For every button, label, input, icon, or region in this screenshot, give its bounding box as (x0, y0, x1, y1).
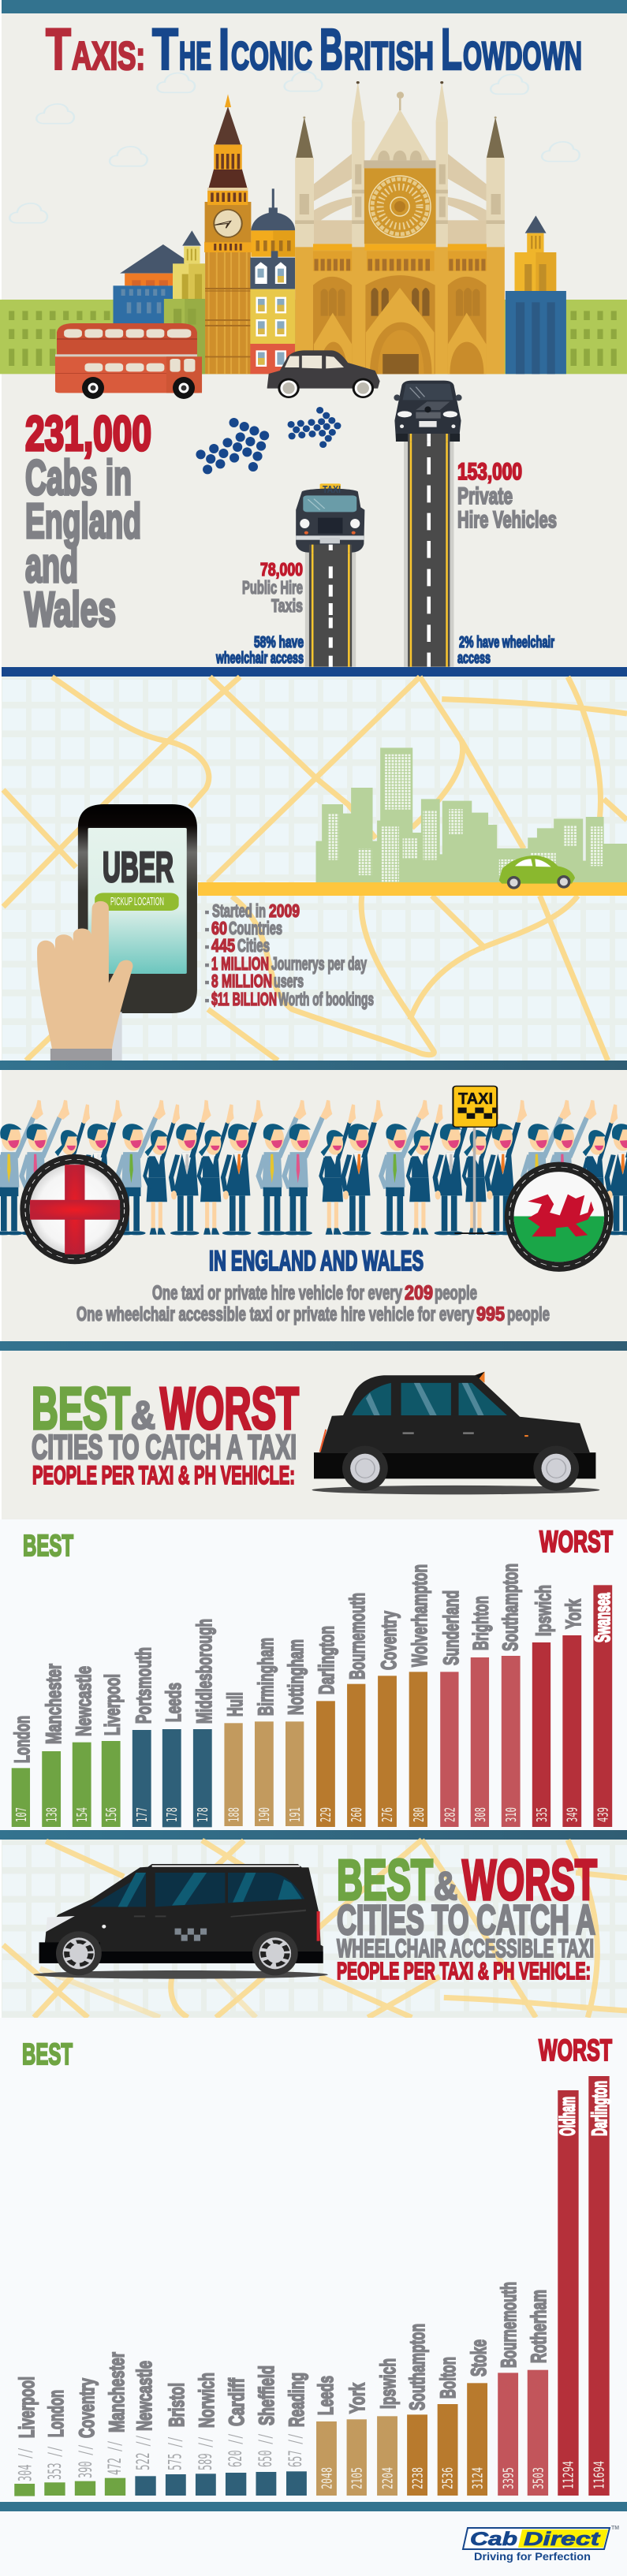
black taxi side view (312, 1372, 600, 1494)
Westminster Abbey (295, 81, 505, 374)
city names: Manchester (105, 2352, 129, 2432)
private hire road markings (408, 434, 450, 442)
bars (12, 1585, 612, 1827)
values above bars: 575 // (166, 2436, 186, 2470)
values: 276 (379, 1807, 396, 1822)
values: 439 (595, 1807, 612, 1822)
values: 178 (164, 1807, 181, 1822)
values: 308 (472, 1807, 489, 1822)
taxi sign text: TAXI (458, 1090, 493, 1108)
panel: chart 1 background (0, 1519, 627, 1830)
clouds (9, 72, 580, 223)
values: 177 (134, 1807, 151, 1822)
city names: Coventry (377, 1611, 401, 1670)
values above bars: 620 // (226, 2433, 246, 2467)
city names: Stoke (467, 2339, 491, 2377)
values above bars: 657 // (286, 2433, 306, 2467)
private hire wheelchair note: access (457, 650, 491, 667)
rose window (369, 176, 431, 237)
values above bars: 304 // (16, 2447, 36, 2481)
values (13, 1807, 612, 1822)
dot arrow large (196, 418, 269, 474)
city names: Brighton (468, 1596, 492, 1650)
values: 280 (411, 1807, 427, 1822)
town houses (250, 188, 295, 374)
city names: Ipswich (532, 1585, 555, 1636)
city names: Southampton (405, 2324, 429, 2410)
bar chart: wheelchair accessible (14, 2076, 611, 2496)
private hire car front (394, 381, 462, 442)
city names: Portsmouth (132, 1647, 155, 1724)
values inside bars (319, 2461, 607, 2489)
uber facts: - (205, 918, 209, 938)
private hire wheelchair note (457, 634, 554, 667)
public hire wheelchair note: 58% have (254, 634, 304, 651)
values: 156 (103, 1807, 120, 1822)
values inside bars: 2048 (319, 2467, 336, 2489)
city names (10, 1564, 614, 1763)
total cabs statistic: and (25, 539, 78, 593)
private hire road (404, 434, 453, 667)
black cab side (267, 350, 380, 398)
heading: best and worst cities: BEST (32, 1375, 130, 1441)
heading: wheelchair accessible (337, 1849, 597, 1985)
left houses (113, 230, 205, 374)
values: 188 (226, 1807, 243, 1822)
title: L (441, 17, 462, 82)
uber facts: - (205, 953, 209, 974)
city names: Southampton (498, 1564, 522, 1651)
city names: Bristol (165, 2383, 188, 2427)
uber facts: Worth of bookings (278, 989, 374, 1009)
logo: Cab Direct (463, 2526, 619, 2563)
city names: Wolverhampton (408, 1564, 431, 1667)
bar chart: people per taxi (10, 1564, 614, 1827)
title: AXIS: (72, 34, 145, 78)
city names: London (44, 2390, 68, 2437)
city names: Darlington (315, 1626, 338, 1694)
city names: Nottingham (284, 1639, 308, 1715)
total cabs statistic: 231,000 (25, 407, 151, 461)
taxi roof sign text: TAXI (323, 483, 341, 495)
city names: Bournemouth (345, 1593, 369, 1679)
best label: BEST (22, 2038, 73, 2071)
Big Ben (204, 94, 252, 374)
values above bars: 522 // (134, 2435, 154, 2470)
city names: Leeds (162, 1683, 185, 1722)
total cabs statistic: Cabs in (25, 451, 132, 505)
values inside bars: 2536 (440, 2467, 456, 2489)
city names: Hull (223, 1692, 247, 1717)
panel: wheelchair map (2, 1840, 627, 2018)
uber facts: 2009 (269, 900, 300, 921)
right tower (506, 215, 566, 374)
heading: wheelchair accessible: BEST (337, 1849, 433, 1912)
total cabs statistic: Wales (24, 583, 116, 637)
public hire wheelchair note: wheelchair access (215, 650, 304, 667)
values above bars: 472 // (106, 2440, 125, 2475)
flag: Wales (505, 1162, 614, 1272)
title: HE (179, 34, 211, 78)
blue divider bar (2, 667, 627, 677)
private hire statistic: Hire Vehicles (457, 507, 557, 533)
values: 282 (442, 1807, 459, 1822)
heading: best and worst cities (32, 1375, 299, 1489)
uber facts: users (274, 971, 304, 991)
city names: Bournemouth (497, 2282, 521, 2368)
city names: Ipswich (376, 2358, 400, 2409)
statistic lines (77, 1282, 550, 1325)
uber facts: - (205, 989, 209, 1009)
values inside bars: 3395 (500, 2467, 517, 2489)
city names: York (562, 1598, 585, 1629)
city names: Bolton (436, 2357, 460, 2399)
city names (15, 2081, 611, 2438)
city names: Oldham (555, 2097, 579, 2136)
public hire statistic: Taxis (271, 595, 303, 616)
map roads (3, 677, 627, 1061)
uber facts: - (205, 971, 209, 991)
values inside bars: 11294 (560, 2461, 577, 2489)
public hire statistic: 78,000 (260, 559, 303, 580)
double decker bus (55, 323, 202, 393)
taxi front (296, 483, 364, 553)
values above bars: 353 // (46, 2446, 65, 2480)
total cabs statistic: England (25, 494, 141, 549)
title: RITISH (344, 34, 434, 78)
uber facts: Journerys per day (271, 953, 367, 974)
uber facts: - (205, 935, 209, 956)
public hire wheelchair note (215, 634, 304, 667)
values: 154 (74, 1807, 91, 1822)
panel: uber map (2, 677, 627, 1061)
heading: wheelchair accessible: & (434, 1864, 457, 1908)
values: 229 (318, 1807, 334, 1822)
city names: Norwich (195, 2373, 218, 2428)
statistic lines: people (435, 1282, 477, 1304)
city skyline (316, 747, 627, 882)
values inside bars: 2204 (380, 2467, 396, 2489)
values inside bars: 11694 (592, 2461, 607, 2489)
values above bars: 650 // (256, 2433, 276, 2467)
city names: Newcastle (72, 1666, 95, 1736)
taxi stop sign (453, 1087, 497, 1234)
values: 190 (256, 1807, 273, 1822)
taxi road (305, 544, 356, 667)
teal divider bar (0, 1341, 627, 1351)
city names: Liverpool (101, 1674, 125, 1735)
private hire statistic: Private (457, 483, 513, 509)
values inside bars: 2105 (349, 2467, 366, 2489)
heading: best and worst cities: CITIES TO CATCH A TAXI (32, 1428, 297, 1467)
uber facts: 8 MILLION (211, 971, 272, 991)
city names: Coventry (75, 2378, 99, 2438)
title: I (218, 17, 230, 82)
city names: Sheffield (255, 2365, 278, 2425)
logo: Cab Direct: Driving for Perfection (474, 2550, 591, 2563)
city names: Swansea (591, 1592, 614, 1642)
city names: Birmingham (254, 1638, 278, 1716)
city names: Manchester (42, 1664, 65, 1744)
uber facts: 60 (211, 918, 227, 938)
public hire statistic: Public Hire (242, 577, 303, 598)
teal divider bar (0, 1061, 627, 1070)
uber facts: Cities (237, 935, 270, 956)
yellow road (198, 882, 627, 896)
values: 191 (287, 1807, 304, 1822)
logo: Cab Direct: Direct (524, 2529, 600, 2550)
city names: Sunderland (439, 1590, 463, 1665)
hand (37, 901, 132, 1061)
uber facts: - Started in (205, 900, 266, 921)
values above bars (16, 2433, 306, 2481)
heading: in england and wales: IN ENGLAND AND WALES (209, 1246, 424, 1277)
city names: Leeds (314, 2376, 338, 2415)
black taxi van (34, 1864, 328, 1979)
illustration: London skyline (0, 72, 627, 374)
statistic lines: One taxi or private hire vehicle for every (152, 1282, 402, 1304)
private hire statistic (457, 459, 557, 533)
public hire statistic (242, 559, 303, 616)
city names: York (345, 2382, 369, 2414)
green background buildings (0, 300, 627, 374)
uber facts: Countries (229, 918, 282, 938)
city names: London (10, 1716, 34, 1763)
city names: Rotherham (527, 2290, 550, 2363)
city names: Newcastle (132, 2361, 156, 2431)
values: 178 (195, 1807, 211, 1822)
private hire wheelchair note: 2% have wheelchair (459, 634, 554, 651)
crowd of people hailing (0, 1100, 627, 1235)
bars (14, 2076, 610, 2496)
values: 260 (349, 1807, 365, 1822)
title: T (46, 17, 71, 82)
total cabs statistic (24, 407, 151, 637)
values: 138 (44, 1807, 60, 1822)
statistic lines: people (507, 1303, 550, 1325)
city names: Cardiff (225, 2377, 248, 2426)
panel: chart 2 background (0, 2018, 627, 2576)
values above bars: 589 // (196, 2436, 216, 2470)
values above bars: 390 // (77, 2444, 96, 2478)
heading: best and worst cities: WORST (160, 1375, 299, 1441)
uber facts: 445 (211, 935, 235, 956)
private hire statistic: 153,000 (457, 459, 522, 485)
logo: Cab Direct: Cab (470, 2529, 517, 2550)
city names: Darlington (588, 2081, 611, 2136)
statistic lines: 995 (476, 1303, 505, 1325)
values inside bars: 2238 (410, 2467, 426, 2489)
uber facts: 1 MILLION (211, 953, 269, 974)
title: CONIC (231, 34, 312, 78)
top banner bar (2, 0, 627, 13)
statistic lines: 209 (405, 1282, 433, 1304)
values: 107 (13, 1807, 30, 1822)
title: B (319, 17, 343, 82)
logo: Cab Direct: TM (611, 2526, 619, 2531)
heading: best and worst cities: PEOPLE PER TAXI & PH VEHICLE: (32, 1461, 295, 1489)
phone (78, 804, 197, 1013)
city names: Liverpool (15, 2377, 39, 2438)
values inside bars: 3124 (470, 2467, 486, 2489)
city names: Reading (285, 2373, 308, 2427)
pickup label: PICKUP LOCATION (110, 895, 164, 908)
uber wordmark: UBER (103, 844, 174, 891)
uber facts: $11 BILLION (211, 989, 277, 1009)
title: T (152, 17, 178, 82)
values inside bars: 3503 (530, 2467, 547, 2489)
uber facts (205, 900, 374, 1009)
teal footer bar (0, 2502, 627, 2511)
values: 335 (534, 1807, 550, 1822)
dot arrow small (288, 407, 341, 448)
heading: best and worst cities: & (131, 1393, 155, 1437)
values: 310 (503, 1807, 520, 1822)
best label: BEST (23, 1530, 73, 1563)
values: 349 (565, 1807, 580, 1822)
teal divider bar (0, 1830, 627, 1840)
green car (499, 856, 575, 889)
flag: England (20, 1154, 129, 1264)
city names: Middlesborough (192, 1619, 216, 1724)
